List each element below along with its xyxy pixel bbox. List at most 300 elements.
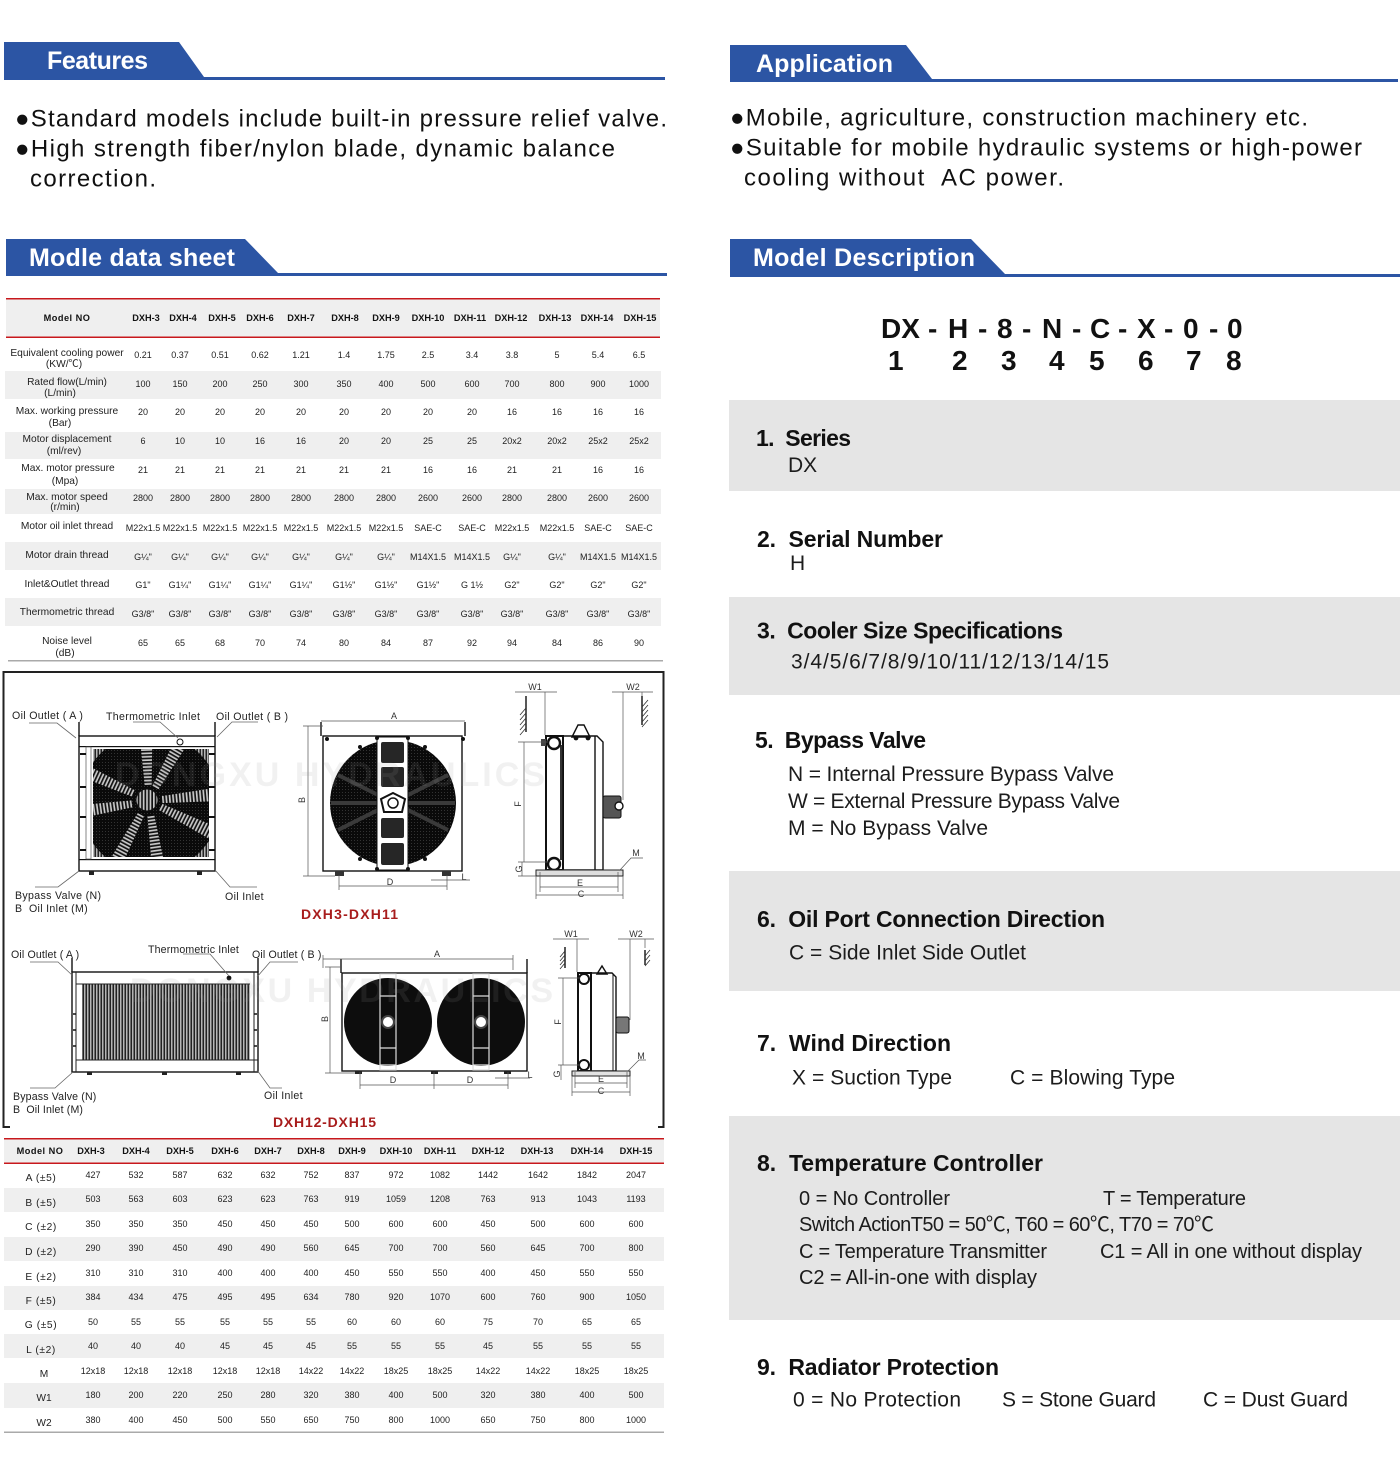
table header row: DXH-10	[412, 313, 444, 323]
row values: 2800	[376, 493, 396, 503]
text block: application	[730, 104, 1362, 192]
row labels: Max. working pressure	[16, 406, 119, 417]
dimensions row values: 400	[128, 1415, 144, 1425]
table header row: DXH-5	[208, 313, 236, 323]
row values: M22x1.5	[243, 523, 277, 533]
row values: G1¼"	[290, 580, 312, 590]
row values: 2800	[170, 493, 190, 503]
dimensions: double side view: F	[553, 1019, 563, 1025]
watermark: upper: DONGXU HYDRAULICS	[115, 756, 545, 794]
labels: top drawing callouts: Bypass Valve (N)	[15, 890, 101, 902]
dimensions row values: 550	[260, 1415, 276, 1425]
model code: -	[1072, 313, 1081, 344]
row values: M14X1.5	[454, 552, 490, 562]
dimensions row values: 450	[480, 1219, 496, 1229]
table header row: DXH-11	[454, 313, 486, 323]
dimensions table header: DXH-9	[338, 1146, 366, 1156]
row values: G3/8"	[249, 609, 271, 619]
dimensions row values: 55	[347, 1341, 357, 1351]
dimensions row values: 400	[260, 1268, 276, 1278]
dimensions row values: 837	[344, 1170, 360, 1180]
labels: bottom drawing callouts: B Oil Inlet (M)	[13, 1104, 83, 1116]
dimensions: rear view: A	[391, 711, 397, 721]
row values: G3/8"	[587, 609, 609, 619]
dimensions row values: 390	[128, 1243, 144, 1253]
labels: top drawing callouts: B Oil Inlet (M)	[15, 903, 88, 915]
row values: 68	[215, 638, 225, 648]
caption: DXH12-DXH15: DXH12-DXH15	[273, 1114, 376, 1130]
row values: G1½"	[417, 580, 439, 590]
dimensions table header: DXH-15	[620, 1146, 652, 1156]
row values: 80	[339, 638, 349, 648]
dimensions row labels: G (±5)	[25, 1320, 57, 1331]
row values: 20	[138, 407, 148, 417]
labels: top drawing callouts	[12, 710, 288, 915]
dimensions row values: 1050	[626, 1292, 646, 1302]
model code: -	[1209, 313, 1218, 344]
dimensions: double side view: W2	[629, 929, 643, 939]
dimensions row values: 14x22	[340, 1366, 364, 1376]
dimensions row values: 250	[217, 1390, 233, 1400]
dimensions row values: 503	[85, 1194, 101, 1204]
dimensions row values: 310	[85, 1268, 101, 1278]
row values: 20	[467, 407, 477, 417]
dimensions row values: 600	[388, 1219, 404, 1229]
row values: 6.5	[633, 350, 645, 360]
dimensions row labels: W2	[36, 1418, 52, 1429]
row values: M22x1.5	[163, 523, 197, 533]
dimensions: double rear view: D	[467, 1075, 474, 1085]
dimensions row values: 750	[530, 1415, 546, 1425]
dimensions row labels: E (±2)	[25, 1272, 57, 1283]
model code: 7	[1186, 345, 1202, 376]
dimensions row values: 55	[533, 1341, 543, 1351]
row values: 100	[135, 379, 151, 389]
dimensions: rear view	[297, 711, 470, 890]
section header: Features	[4, 42, 665, 80]
row values: 25x2	[588, 436, 608, 446]
dimensions row values: 550	[432, 1268, 448, 1278]
dimensions row values: 380	[344, 1390, 360, 1400]
description band: 1 Series: 1. Series	[756, 425, 851, 451]
dimensions row values: 1642	[528, 1170, 548, 1180]
dimensions row values: 800	[628, 1243, 644, 1253]
drawing: DXH3-DXH11 rear view	[321, 722, 465, 876]
dimensions row values: 400	[303, 1268, 319, 1278]
dimensions table header: DXH-12	[472, 1146, 504, 1156]
description band: 3 Cooler Size Specifications: 3. Cooler Size Specifications	[757, 618, 1063, 644]
row values: 16	[467, 465, 477, 475]
dimensions row values: 1082	[430, 1170, 450, 1180]
row values: SAE-C	[625, 523, 653, 533]
row values: 300	[293, 379, 309, 389]
description: 7 Wind Direction: X = Suction Type	[792, 1066, 952, 1090]
row values: 21	[175, 465, 185, 475]
labels: bottom drawing callouts: Oil Outlet ( A )	[11, 949, 79, 961]
row values: 2800	[502, 493, 522, 503]
row values: 94	[507, 638, 517, 648]
row values: G¼"	[134, 552, 152, 562]
row values: 2600	[462, 493, 482, 503]
row values: G¼"	[211, 552, 229, 562]
row values: G1½"	[333, 580, 355, 590]
dimensions row values: 350	[172, 1219, 188, 1229]
dimensions row values: 60	[347, 1317, 357, 1327]
dimensions row values: 919	[344, 1194, 360, 1204]
dimensions row values: 800	[388, 1415, 404, 1425]
dimensions table header: DXH-14	[571, 1146, 604, 1156]
dimensions row values: 500	[628, 1390, 644, 1400]
row values: G1¼"	[249, 580, 271, 590]
model code: DX	[881, 313, 920, 344]
row values: 20	[296, 407, 306, 417]
row values: 70	[255, 638, 265, 648]
row values: G 1½	[461, 580, 483, 590]
dimensions row labels: C (±2)	[25, 1222, 57, 1233]
dimensions row labels: D (±2)	[25, 1247, 57, 1258]
row values: 20	[215, 407, 225, 417]
dimensions row values: 623	[260, 1194, 276, 1204]
row values: 0.21	[134, 350, 152, 360]
dimensions row values: 400	[217, 1268, 233, 1278]
dimensions row values: 752	[303, 1170, 319, 1180]
dimensions row values: 780	[344, 1292, 360, 1302]
row values: 21	[339, 465, 349, 475]
dimensions row values: 280	[260, 1390, 276, 1400]
dimensions row values: 560	[303, 1243, 319, 1253]
dimensions row values: 700	[388, 1243, 404, 1253]
dimensions row values: 40	[131, 1341, 141, 1351]
dimensions row values: 55	[391, 1341, 401, 1351]
dimensions row labels: A (±5)	[26, 1173, 56, 1184]
dimensions row values: 634	[303, 1292, 319, 1302]
description: 9 Radiator Protection: S = Stone Guard	[1002, 1388, 1156, 1412]
dimensions table header: Model NO	[17, 1146, 63, 1156]
dimensions table header: DXH-3	[77, 1146, 105, 1156]
row labels	[10, 348, 124, 659]
dimensions row values: 500	[344, 1219, 360, 1229]
dimensions row labels: M	[40, 1369, 48, 1380]
dimensions row values: 55	[220, 1317, 230, 1327]
dimensions row values: 12x18	[256, 1366, 280, 1376]
dimensions row values: 1043	[577, 1194, 597, 1204]
dimensions row values: 45	[263, 1341, 273, 1351]
row values: 16	[593, 407, 603, 417]
dimensions row values: 290	[85, 1243, 101, 1253]
dimensions row values: 400	[480, 1268, 496, 1278]
dimensions row values: 12x18	[168, 1366, 192, 1376]
row labels: Thermometric thread	[20, 607, 115, 618]
description band: 8 Temperature Controller	[729, 1116, 1400, 1320]
row values: 16	[634, 465, 644, 475]
model code: 0	[1227, 313, 1243, 344]
table header row: DXH-9	[372, 313, 400, 323]
row values: 25x2	[629, 436, 649, 446]
description: 5 Bypass Valve: N = Internal Pressure Bypass Valve	[788, 763, 1114, 786]
dimensions table header: DXH-8	[297, 1146, 325, 1156]
dimensions: side view: G	[514, 865, 524, 873]
row values: G2"	[504, 580, 520, 590]
row values: 150	[172, 379, 188, 389]
dimensions row values: 490	[217, 1243, 233, 1253]
dimensions row values: 532	[128, 1170, 144, 1180]
row values: 21	[296, 465, 306, 475]
row labels: Motor oil inlet thread	[21, 521, 113, 532]
row values: 3.4	[466, 350, 478, 360]
dimensions row values: 1070	[430, 1292, 450, 1302]
labels: bottom drawing callouts: Oil Outlet ( B )	[252, 949, 322, 961]
description band: 8 Temperature Controller: 0 = No Controller	[799, 1188, 950, 1210]
description band: 3 Cooler Size Specifications	[729, 597, 1400, 695]
dimensions row values: 180	[85, 1390, 101, 1400]
dimensions row values: 350	[85, 1219, 101, 1229]
dimensions row values: 380	[530, 1390, 546, 1400]
row values: 1000	[629, 379, 649, 389]
row values: 20x2	[547, 436, 567, 446]
row values: 800	[549, 379, 565, 389]
row values: 86	[593, 638, 603, 648]
row values: SAE-C	[458, 523, 486, 533]
dimensions row values: 380	[85, 1415, 101, 1425]
row values: M22x1.5	[327, 523, 361, 533]
labels: top drawing callouts: Oil Outlet ( A )	[12, 710, 83, 722]
dimensions: rear view: L	[461, 872, 467, 882]
row labels: Motor drain thread	[25, 550, 109, 561]
dimensions row values: 450	[530, 1268, 546, 1278]
model code: 4	[1049, 345, 1065, 376]
dimensions row values: 55	[582, 1341, 592, 1351]
model code: X	[1137, 313, 1156, 344]
description: 9 Radiator Protection: 0 = No Protection	[793, 1388, 961, 1412]
text block: features: ●Standard models include built-in pressure relief valve.	[15, 106, 667, 132]
row values: G3/8"	[417, 609, 439, 619]
description band: 3 Cooler Size Specifications: 3/4/5/6/7/8/9/10/11/12/13/14/15	[791, 650, 1109, 674]
dimensions row values: 1442	[478, 1170, 498, 1180]
dimensions row values: 55	[631, 1341, 641, 1351]
row labels: (r/min)	[50, 502, 80, 513]
model code: C	[1090, 313, 1110, 344]
row values: 10	[215, 436, 225, 446]
row values: G¼"	[171, 552, 189, 562]
row labels: Max. motor pressure	[21, 463, 115, 474]
row values: 3.8	[506, 350, 518, 360]
row values: 2.5	[422, 350, 434, 360]
row values: 16	[255, 436, 265, 446]
dimensions: rear view: D	[387, 877, 394, 887]
row values: M22x1.5	[203, 523, 237, 533]
row values: 2800	[250, 493, 270, 503]
row values: G1¼"	[169, 580, 191, 590]
dimensions row values: 65	[631, 1317, 641, 1327]
section header: Modle data sheet	[6, 239, 667, 276]
row values: 2600	[588, 493, 608, 503]
row labels: Rated flow(L/min)	[27, 377, 107, 388]
dimensions row values: 55	[131, 1317, 141, 1327]
dimensions table header: DXH-4	[122, 1146, 151, 1156]
row values: 16	[423, 465, 433, 475]
dimensions row values: 750	[344, 1415, 360, 1425]
row labels: (ml/rev)	[47, 446, 81, 457]
dimensions: double rear view: B	[320, 1016, 330, 1022]
row values: 84	[552, 638, 562, 648]
dimensions row values: 45	[220, 1341, 230, 1351]
dimensions row values: 14x22	[476, 1366, 500, 1376]
row values: G2"	[631, 580, 647, 590]
table header row: DXH-8	[331, 313, 359, 323]
row values: 21	[255, 465, 265, 475]
row values: 2600	[418, 493, 438, 503]
description: 2 Serial Number: H	[790, 552, 805, 575]
dimensions row values: 18x25	[624, 1366, 648, 1376]
row values: 20	[339, 436, 349, 446]
model code: -	[928, 313, 937, 344]
row values: SAE-C	[414, 523, 442, 533]
drawing: DXH12-DXH15 side view	[553, 939, 654, 1076]
row values: 20	[175, 407, 185, 417]
description band: 8 Temperature Controller: 8. Temperature Controller	[757, 1150, 1043, 1176]
labels: bottom drawing callouts	[11, 944, 322, 1116]
dimensions row values: 55	[263, 1317, 273, 1327]
dimensions row values: 50	[88, 1317, 98, 1327]
model code: -	[978, 313, 987, 344]
description band: 1 Series	[729, 400, 1400, 491]
text block: application: cooling without AC power.	[744, 164, 1064, 192]
dimensions row values: 320	[303, 1390, 319, 1400]
dimensions table header: DXH-11	[424, 1146, 456, 1156]
dimensions: double side view: E	[598, 1074, 604, 1084]
dimensions row values: 400	[388, 1390, 404, 1400]
row values: G3/8"	[169, 609, 191, 619]
labels: bottom drawing callouts: Bypass Valve (N)	[13, 1091, 96, 1103]
row labels: Max. motor speed	[26, 492, 108, 503]
model code: H	[948, 313, 968, 344]
dimensions: double side view: C	[598, 1086, 605, 1096]
row values: 500	[420, 379, 436, 389]
row values: M14X1.5	[621, 552, 657, 562]
section header: Model Description: Model Description	[753, 244, 975, 272]
row values: 200	[212, 379, 228, 389]
description band: 8 Temperature Controller: C2 = All-in-one with display	[799, 1267, 1037, 1289]
dimensions: side view: W1	[528, 682, 542, 692]
dimensions row values: 384	[85, 1292, 101, 1302]
table header row: DXH-3	[132, 313, 160, 323]
row values: 16	[593, 465, 603, 475]
table header row: DXH-7	[287, 313, 315, 323]
description band: 6 Oil Port Connection Direction	[729, 871, 1400, 991]
model code: -	[1022, 313, 1031, 344]
dimensions table header: DXH-10	[380, 1146, 412, 1156]
row values: M22x1.5	[126, 523, 160, 533]
row values: 90	[634, 638, 644, 648]
row labels: Inlet&Outlet thread	[25, 579, 110, 590]
dimensions row values: 500	[530, 1219, 546, 1229]
row values: 21	[138, 465, 148, 475]
dimensions row values: 563	[128, 1194, 144, 1204]
model code: 8	[997, 313, 1013, 344]
description band: 6 Oil Port Connection Direction: 6. Oil Port Connection Direction	[757, 906, 1105, 932]
model code: 5	[1089, 345, 1105, 376]
section header: Application	[730, 45, 1398, 82]
row values: 350	[336, 379, 352, 389]
table header row: DXH-14	[581, 313, 614, 323]
dimensions row values: 550	[388, 1268, 404, 1278]
model code	[881, 313, 1243, 376]
text block: application: ●Suitable for mobile hydraulic systems or high-power	[730, 134, 1362, 162]
dimensions row values: 75	[483, 1317, 493, 1327]
dimensions row values: 490	[260, 1243, 276, 1253]
row values: 2800	[334, 493, 354, 503]
dimensions row values: 450	[217, 1219, 233, 1229]
row values: 21	[215, 465, 225, 475]
row values: 1.75	[377, 350, 395, 360]
dimensions row values: 70	[533, 1317, 543, 1327]
dimensions: double side view: G	[552, 1070, 562, 1078]
drawing: DXH3-DXH11 side view	[515, 692, 653, 876]
dimensions row values: 12x18	[213, 1366, 237, 1376]
table: model data sheet	[5, 298, 663, 662]
row values: 16	[296, 436, 306, 446]
row values: 21	[552, 465, 562, 475]
dimensions row values: 434	[128, 1292, 144, 1302]
row values: G1¼"	[209, 580, 231, 590]
description: 7 Wind Direction: C = Blowing Type	[1010, 1066, 1175, 1090]
dimensions: rear view: B	[297, 797, 307, 803]
table header row: Model NO	[44, 313, 90, 323]
row values: 20	[339, 407, 349, 417]
row values: 700	[504, 379, 520, 389]
description band: 6 Oil Port Connection Direction: C = Side Inlet Side Outlet	[789, 942, 1026, 964]
panel frame	[4, 672, 664, 1127]
dimensions row values: 450	[303, 1219, 319, 1229]
dimensions row values: 1208	[430, 1194, 450, 1204]
labels: bottom drawing callouts: Thermometric Inlet	[148, 944, 239, 956]
description: 7 Wind Direction	[757, 1030, 1175, 1090]
row values: 21	[507, 465, 517, 475]
dimensions row values: 12x18	[124, 1366, 148, 1376]
model code: 0	[1183, 313, 1199, 344]
row values: 74	[296, 638, 306, 648]
description: 2 Serial Number: 2. Serial Number	[757, 526, 943, 552]
row values: 2800	[547, 493, 567, 503]
dimensions row values: 320	[480, 1390, 496, 1400]
dimensions row values: 600	[579, 1219, 595, 1229]
text block: features: ●High strength fiber/nylon blade, dynamic balance	[15, 136, 615, 162]
table header row: DXH-15	[624, 313, 656, 323]
row values: 400	[378, 379, 394, 389]
dimensions row values: 763	[303, 1194, 319, 1204]
dimensions row values: 450	[260, 1219, 276, 1229]
row values: G1"	[135, 580, 151, 590]
labels: top drawing callouts: Thermometric Inlet	[106, 711, 200, 723]
dimensions row values: 800	[579, 1415, 595, 1425]
row values: 1.21	[292, 350, 310, 360]
row values: 0.51	[211, 350, 229, 360]
row values: 6	[140, 436, 146, 446]
dimensions: side view	[513, 682, 643, 899]
dimensions row values: 600	[432, 1219, 448, 1229]
description band: 1 Series: DX	[788, 454, 817, 477]
dimensions table header: DXH-5	[166, 1146, 194, 1156]
dimensions row values: 645	[344, 1243, 360, 1253]
row values: 16	[634, 407, 644, 417]
dimensions row values: 18x25	[575, 1366, 599, 1376]
model code: 8	[1226, 345, 1242, 376]
row values: G¼"	[548, 552, 566, 562]
dimensions: double rear view: L	[527, 1070, 533, 1080]
row values: G3/8"	[375, 609, 397, 619]
dimensions row values: 600	[480, 1292, 496, 1302]
row values: G3/8"	[333, 609, 355, 619]
